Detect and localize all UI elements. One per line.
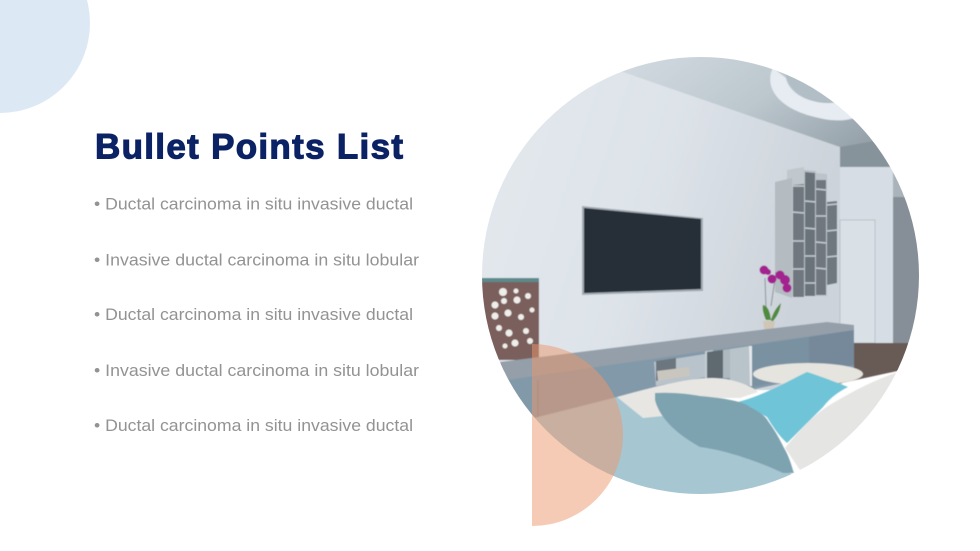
media console top surface xyxy=(500,322,854,381)
white throw pillow xyxy=(617,378,758,418)
wall-mounted TV xyxy=(582,206,703,295)
floor xyxy=(838,342,908,384)
wall xyxy=(480,50,842,390)
ceiling xyxy=(622,57,873,148)
soffit shadow xyxy=(840,142,880,166)
media console open shelves xyxy=(654,346,753,386)
sofa seat xyxy=(535,396,792,494)
right white pillow xyxy=(785,372,896,470)
hallway wall xyxy=(840,167,893,343)
title: Bullet Points List xyxy=(95,128,403,166)
peach half-circle overlay xyxy=(532,344,623,526)
ceiling light ring xyxy=(770,68,854,120)
orchid plant xyxy=(760,266,792,333)
dark right wall xyxy=(892,199,919,344)
wall art xyxy=(480,278,539,360)
bullet item 2: • Invasive ductal carcinoma in situ lobular xyxy=(94,252,420,270)
cyan fur pillow xyxy=(738,372,848,443)
wall shelf unit xyxy=(775,167,837,298)
round coffee table xyxy=(753,363,863,385)
bullet item 5: • Ductal carcinoma in situ invasive ductal xyxy=(94,417,413,435)
bullet item 1: • Ductal carcinoma in situ invasive ductal xyxy=(94,196,413,214)
decorative quarter circle top-left xyxy=(0,0,90,113)
media console seam xyxy=(537,380,539,418)
hallway door xyxy=(840,220,875,343)
bullet item 4: • Invasive ductal carcinoma in situ lobular xyxy=(94,362,420,380)
media console right cabinets xyxy=(752,330,854,387)
bullet item 3: • Ductal carcinoma in situ invasive ductal xyxy=(94,306,413,324)
grey-blue pillow xyxy=(655,393,794,473)
circular room photo xyxy=(480,50,930,520)
media console front xyxy=(508,330,855,418)
bullet list xyxy=(94,196,420,435)
